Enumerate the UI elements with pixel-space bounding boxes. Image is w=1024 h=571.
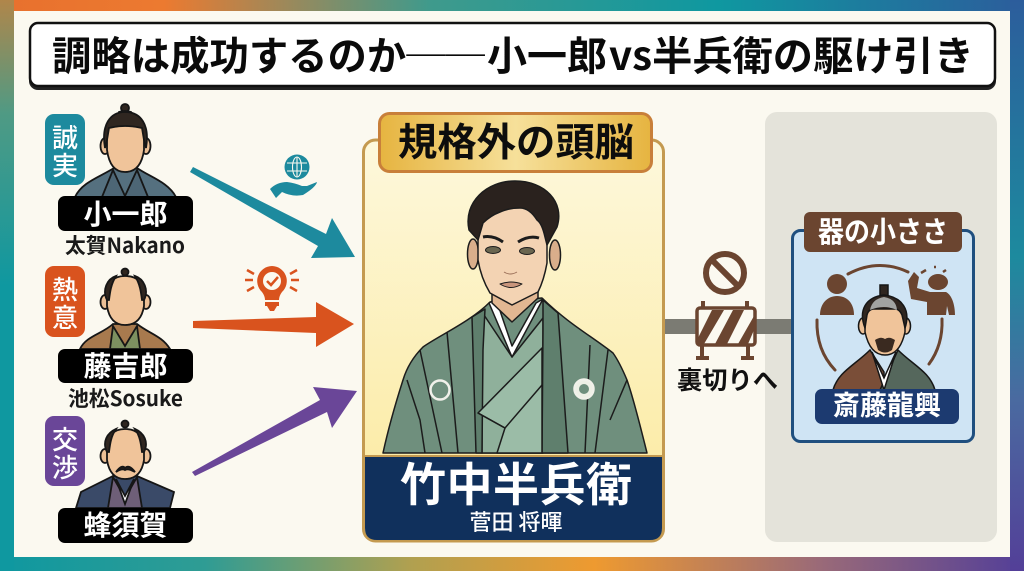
- name band: 菅田 将暉: [470, 505, 562, 537]
- icon: globe in hand: [270, 154, 317, 198]
- connector bar: [665, 319, 793, 334]
- tag: 誠実: 誠: [52, 118, 78, 155]
- tag: 熱意: [45, 266, 85, 337]
- figure: 蜂須賀: [76, 420, 174, 508]
- name: 蜂須賀: 蜂須賀: [83, 504, 168, 544]
- figure: 藤吉郎: [80, 268, 170, 349]
- name: 蜂須賀: [58, 504, 193, 544]
- name: 小一郎: 小一郎: [83, 193, 168, 233]
- panel: central card 竹中半兵衛: [364, 112, 664, 541]
- panel: gray area: [765, 112, 997, 542]
- tag: 交渉: 渉: [52, 448, 78, 485]
- header: 器の小ささ: 器の小ささ: [818, 209, 948, 251]
- tag: 誠実: [45, 114, 85, 185]
- arrow: purple: [192, 387, 357, 476]
- arcs: [817, 265, 942, 370]
- tag: 交渉: 交: [52, 420, 78, 457]
- name: 藤吉郎: [58, 345, 193, 385]
- icon: prohibition sign: [706, 254, 744, 292]
- panel: person 蜂須賀: [45, 416, 193, 544]
- name: 斎藤龍興: 斎藤龍興: [833, 384, 941, 423]
- title: vs半兵衛の駆け引き: [609, 24, 974, 82]
- name: 小一郎: [58, 193, 193, 233]
- arrow: orange: [193, 302, 354, 347]
- tag: 交渉: [45, 416, 85, 486]
- panel: person 小一郎: [45, 104, 193, 260]
- actor: 池松Sosuke: 池松Sosuke: [68, 383, 183, 413]
- title: 小一郎: [487, 24, 607, 82]
- portrait: [383, 181, 647, 453]
- panel: 斎藤龍興: [792, 209, 974, 442]
- actor: 太賀Nakano: 太賀Nakano: [65, 230, 185, 260]
- icon: light bulb with check: [245, 266, 299, 311]
- figure: 小一郎: [75, 104, 176, 197]
- panel: person 藤吉郎: [45, 266, 193, 413]
- tag: 熱意: 熱: [52, 270, 78, 307]
- name band: 竹中半兵衛: [400, 449, 632, 515]
- icon: person scratching head: [908, 267, 955, 315]
- header: 規格外の頭脳: 規格外の頭脳: [398, 112, 634, 168]
- tag: 熱意: 意: [52, 298, 78, 335]
- icon: person: [820, 274, 854, 315]
- title: [29, 23, 996, 90]
- arrow: teal: [190, 167, 355, 258]
- label: 裏切りへ: 裏切りへ: [677, 361, 778, 397]
- name: 藤吉郎: 藤吉郎: [83, 345, 168, 385]
- icon: barricade: [696, 301, 755, 358]
- title: 調略は成功するのか──: [52, 24, 485, 82]
- name band: [365, 449, 662, 540]
- figure: 斎藤龍興: [833, 285, 935, 390]
- tag: 誠実: 実: [52, 146, 78, 183]
